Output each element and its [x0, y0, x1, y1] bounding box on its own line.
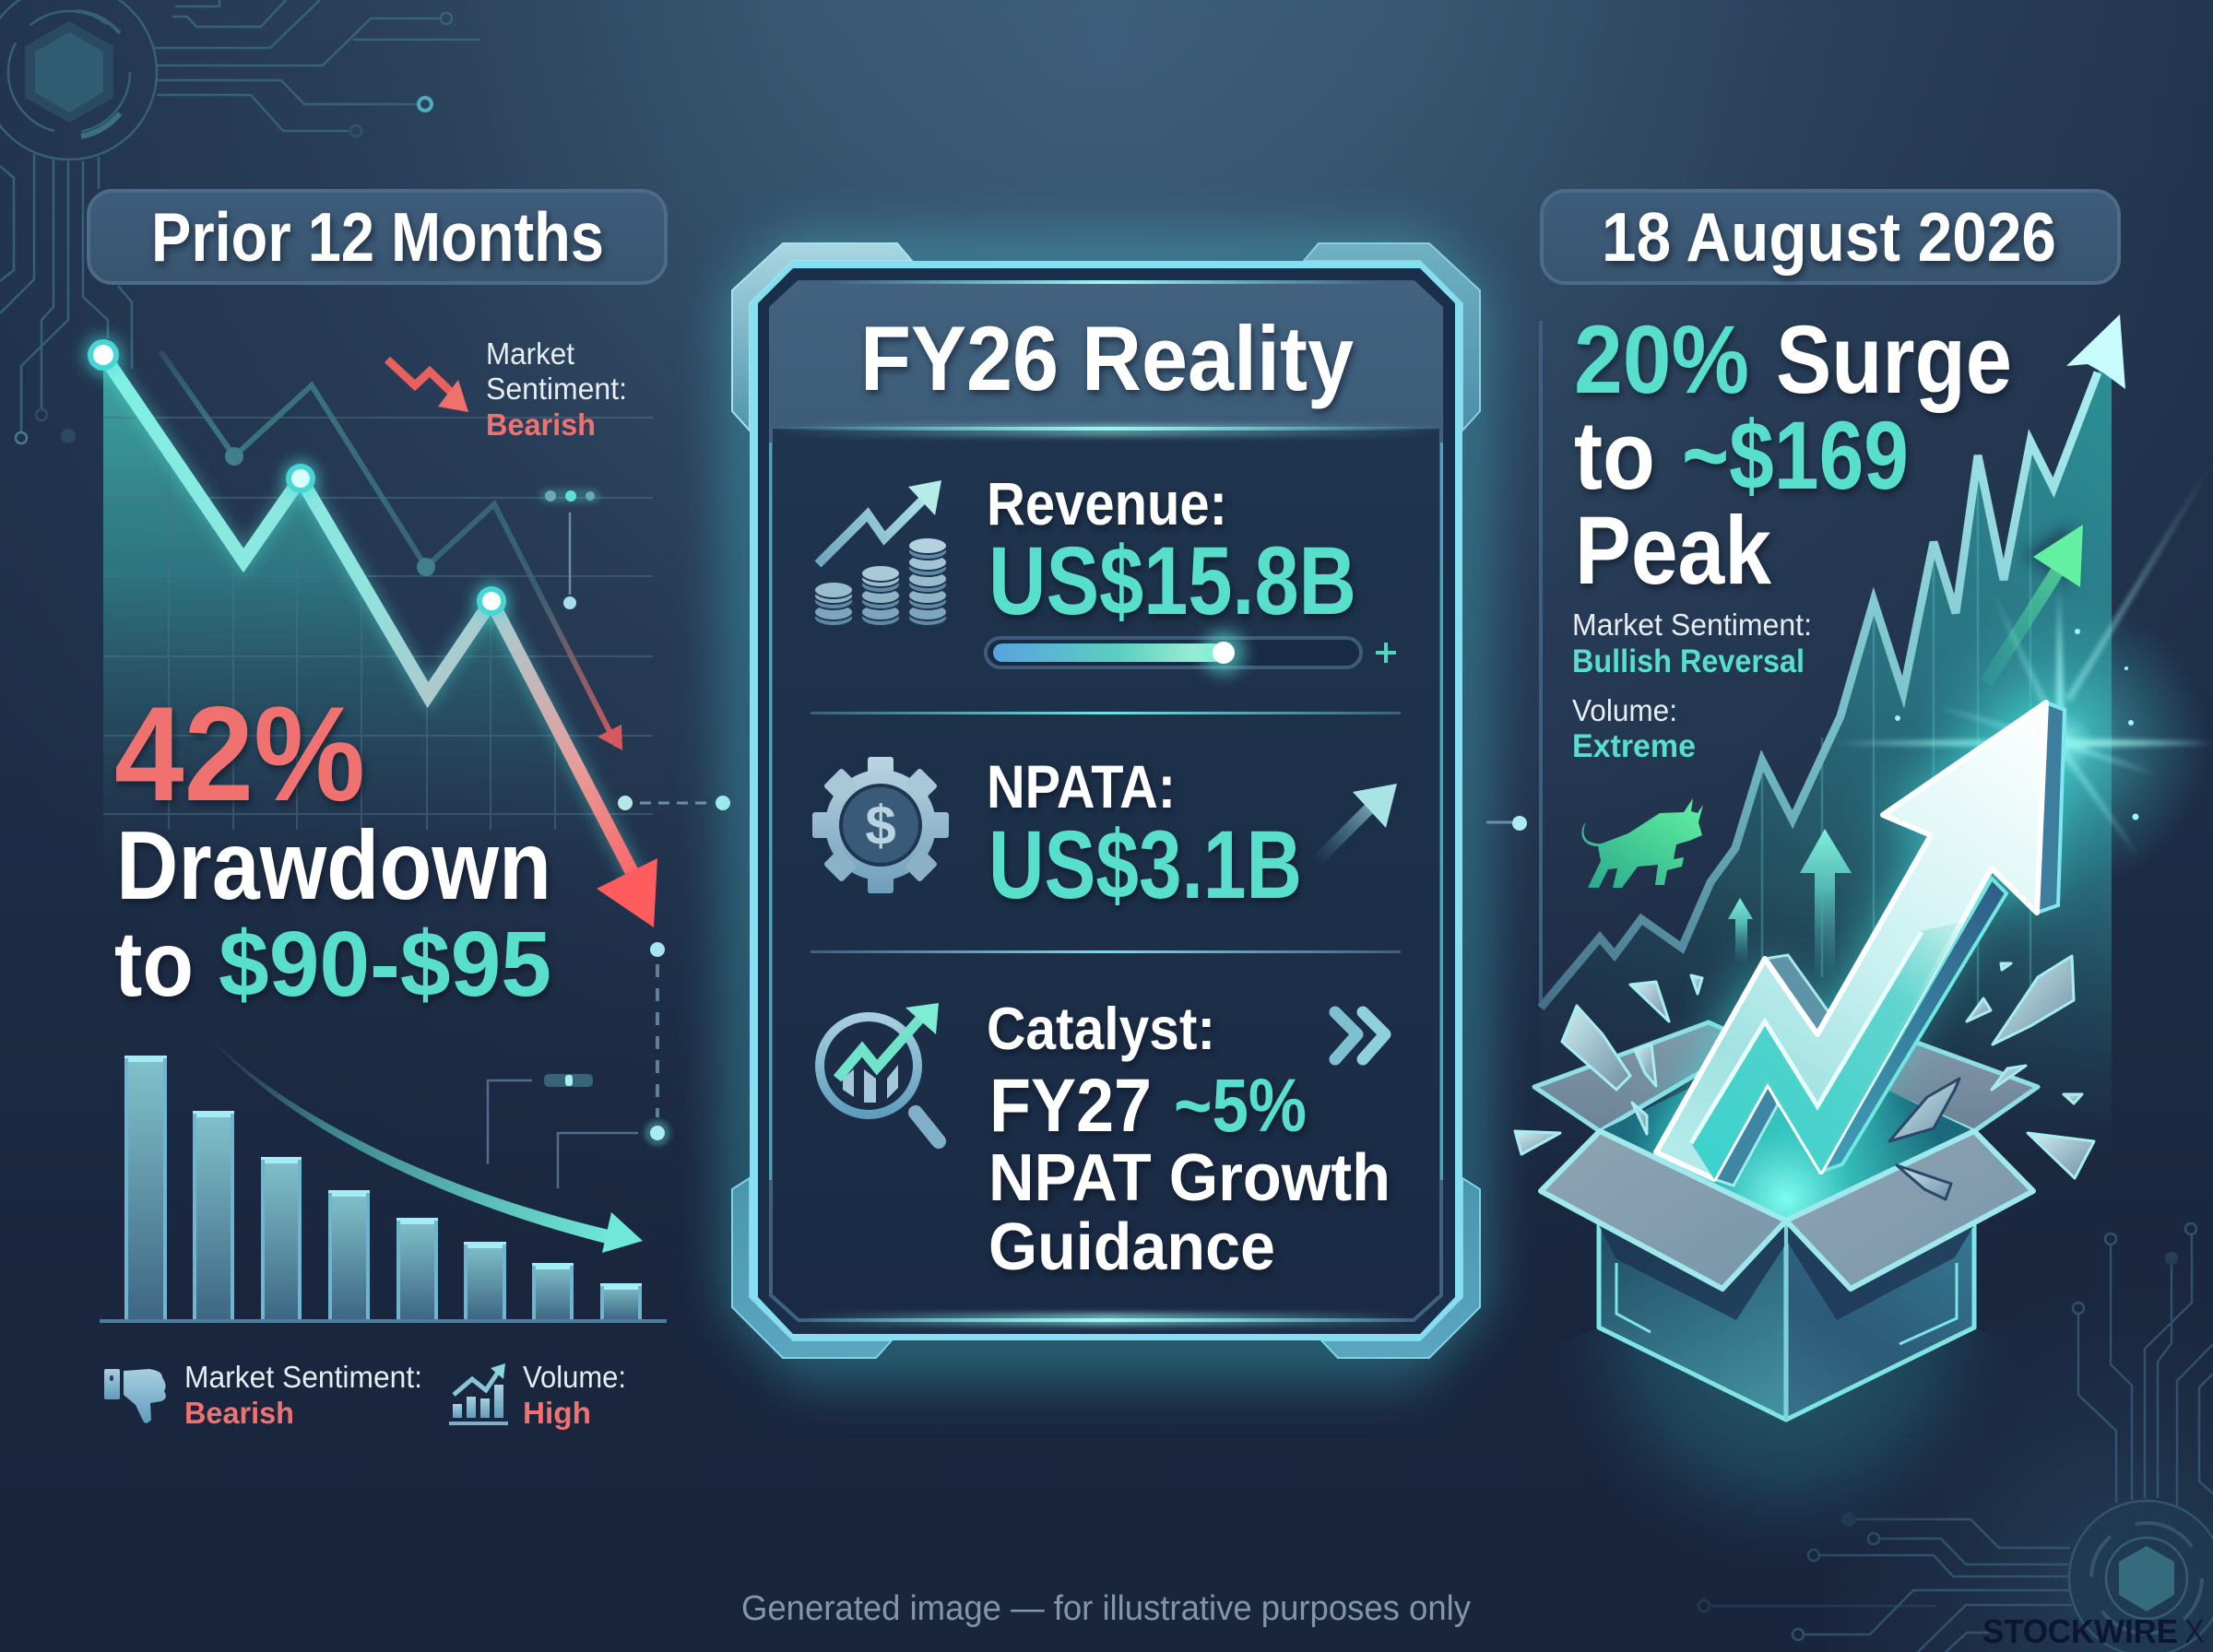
- center panel: FY26 reality: [732, 243, 1480, 1392]
- panel frame: [732, 243, 1480, 1392]
- icon: volume chart: [449, 1363, 508, 1425]
- footer note: Generated image — for illustrative purposes only: [741, 1589, 1471, 1628]
- glowing arrow: halo: [1656, 702, 2065, 1179]
- catalyst metric: FY27: [989, 1064, 1152, 1148]
- headline: 42% drawdown to $90-$95: to: [114, 913, 194, 1016]
- starburst glow: [1835, 467, 2213, 891]
- NPATA metric: US$3.1B: [988, 811, 1302, 919]
- headline: 20% surge to ~$169 peak: ~$169: [1682, 402, 1909, 510]
- headline: 20% surge to ~$169 peak: Surge: [1776, 306, 2012, 414]
- green rising arrow: [1986, 523, 2083, 683]
- icon: NPATA rising arrow: [1317, 784, 1397, 861]
- market sentiment label: bearish: Sentiment:: [486, 372, 627, 406]
- icon: gear with dollar sign: [812, 757, 949, 893]
- volume legend: high: [523, 1360, 626, 1430]
- icon: bull: [1582, 798, 1703, 888]
- icon: gear with dollar sign: $: [865, 795, 896, 856]
- volume bar chart with declining curve arrow: [100, 1026, 667, 1323]
- heading pill: Prior 12 Months: Prior 12 Months: [151, 198, 604, 276]
- small up arrows: [1728, 829, 1852, 977]
- circuit decoration: bottom-right: [1698, 1223, 2213, 1652]
- market sentiment label: bearish: Bearish: [486, 407, 596, 442]
- icon: thumbs down: [104, 1369, 166, 1423]
- market sentiment: bullish reversal: [1572, 608, 1812, 679]
- volume legend: high: High: [523, 1396, 591, 1430]
- revenue progress bar: [986, 631, 1396, 675]
- icon: bearish zigzag arrow: [387, 360, 468, 412]
- headline: 20% surge to ~$169 peak: Peak: [1575, 497, 1772, 605]
- price drawdown line chart: [83, 335, 657, 927]
- box front flaps: [1541, 1131, 2033, 1289]
- opened box with emerging arrow: [1485, 702, 2094, 1586]
- catalyst metric: NPAT Growth: [988, 1141, 1391, 1215]
- catalyst metric: Catalyst:: [987, 995, 1215, 1062]
- catalyst metric: Guidance: [988, 1210, 1275, 1284]
- floor shadow: [1485, 1328, 2087, 1586]
- watermark: STOCKWIRE: [1982, 1612, 2178, 1650]
- market sentiment label: bearish: Market: [486, 336, 574, 371]
- heading pill: 18 August 2026: 18 August 2026: [1602, 198, 2056, 276]
- glowing arrow: inner teal band: [1691, 922, 1964, 1179]
- volume legend: high: Volume:: [523, 1360, 626, 1394]
- divider: [811, 712, 1401, 714]
- market sentiment legend: bearish: Bearish: [184, 1396, 294, 1430]
- right panel: 18 August 2026: [1485, 191, 2213, 1586]
- market sentiment legend: bearish: Market Sentiment:: [184, 1360, 422, 1394]
- NPATA metric: [987, 752, 1302, 919]
- panel heading: FY26 Reality: [860, 307, 1354, 409]
- chart node dots and connectors: [539, 489, 730, 1146]
- revenue metric: Revenue:: [987, 469, 1227, 537]
- market sentiment: bullish reversal: Market Sentiment:: [1572, 608, 1812, 642]
- box back flaps: [1534, 1022, 2038, 1131]
- market sentiment label: bearish: [486, 336, 627, 442]
- market sentiment: bullish reversal: Bullish Reversal: [1572, 643, 1805, 679]
- divider: [811, 950, 1401, 953]
- box front faces: [1599, 1221, 1786, 1420]
- connector dot: [1486, 816, 1527, 831]
- volume: extreme: Volume:: [1572, 693, 1677, 727]
- volume: extreme: Extreme: [1572, 728, 1696, 764]
- NPATA metric: NPATA:: [987, 752, 1176, 820]
- icon: magnifier with growth chart: [820, 1003, 939, 1141]
- flying shards: [1515, 956, 2094, 1199]
- watermark: X: [2184, 1612, 2205, 1650]
- market sentiment legend: bearish: [184, 1360, 422, 1430]
- left panel: prior 12 months: [83, 191, 730, 1430]
- glowing arrow: inner zigzag: [1691, 932, 1922, 1143]
- headline: 42% drawdown to $90-$95: [114, 678, 551, 1016]
- catalyst metric: [987, 995, 1391, 1284]
- icon: double chevron: [1335, 1012, 1385, 1059]
- headline: 42% drawdown to $90-$95: Drawdown: [116, 811, 551, 920]
- headline: 20% surge to ~$169 peak: [1574, 306, 2012, 605]
- headline: 20% surge to ~$169 peak: to: [1574, 402, 1655, 510]
- headline: 20% surge to ~$169 peak: 20%: [1574, 306, 1749, 414]
- glowing arrow: side faces: [1714, 702, 2065, 1186]
- volume: extreme: [1572, 693, 1696, 764]
- glowing arrow: front face: [1656, 702, 2046, 1179]
- surge line chart: [1538, 314, 2125, 1104]
- icon: revenue coins and rising arrow: [814, 480, 947, 626]
- circuit decoration: top-left: [0, 0, 479, 443]
- box interior glow: [1600, 1042, 1974, 1221]
- catalyst metric: ~5%: [1174, 1064, 1307, 1148]
- revenue metric: US$15.8B: [988, 527, 1356, 635]
- revenue metric: [987, 469, 1356, 635]
- headline: 42% drawdown to $90-$95: $90-$95: [219, 913, 551, 1016]
- headline: 42% drawdown to $90-$95: 42%: [114, 678, 365, 829]
